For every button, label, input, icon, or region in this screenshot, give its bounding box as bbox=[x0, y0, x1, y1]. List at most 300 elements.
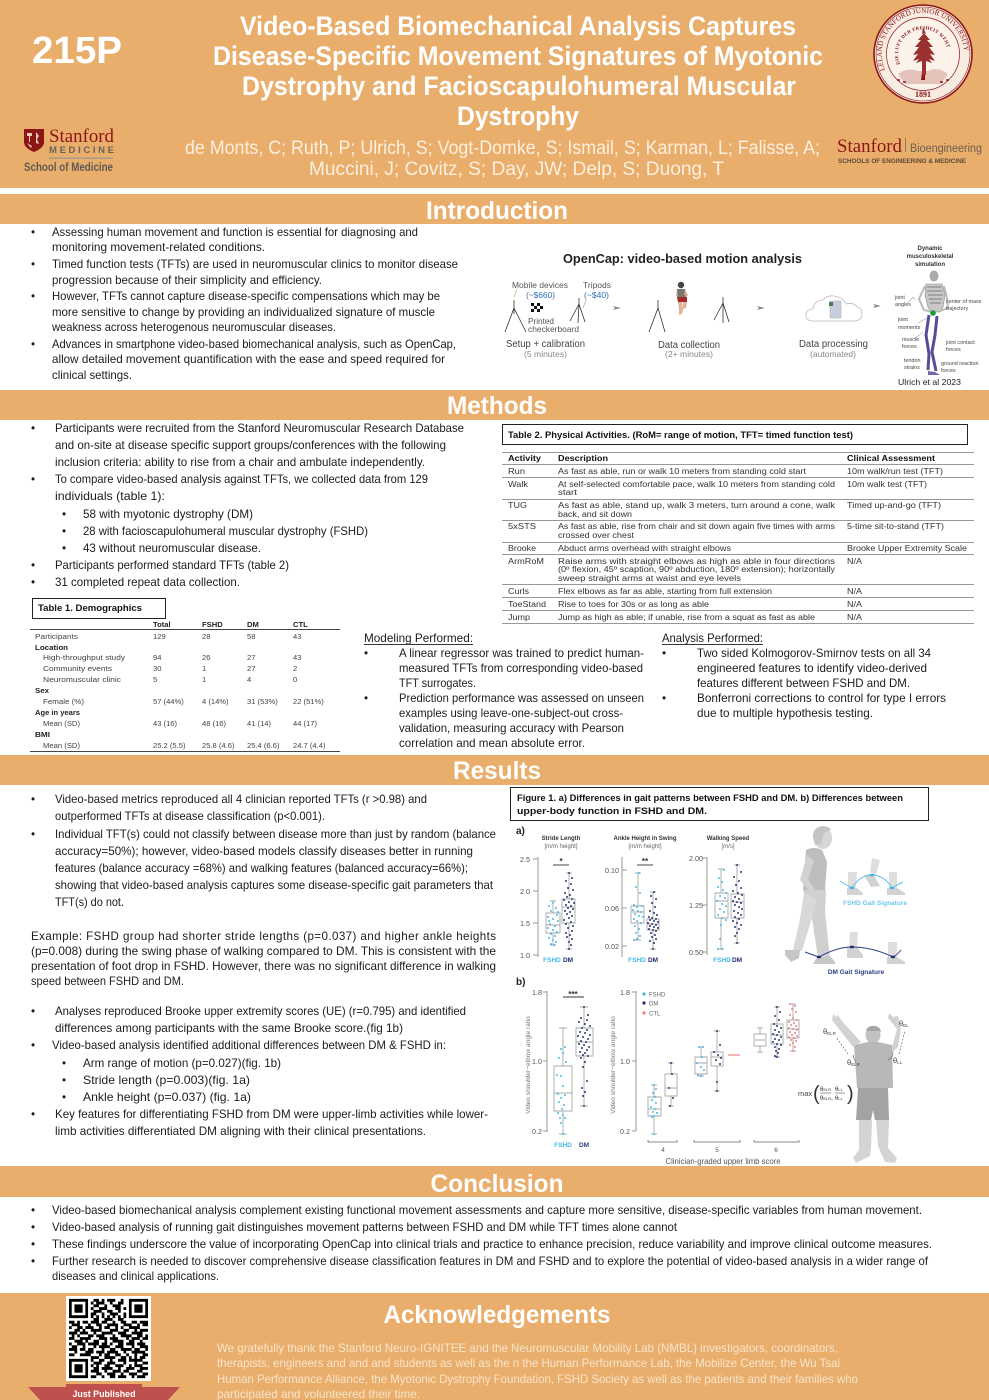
text block: introduction bullets: • bbox=[31, 258, 35, 271]
chart: ratio by clinician score: Clinician-graded upper limb score bbox=[666, 1157, 781, 1166]
logo: Stanford seal: 1891 bbox=[915, 90, 931, 99]
chart: ratio by clinician score: 0.2 bbox=[620, 1127, 630, 1136]
logo: Stanford Medicine: Stanford bbox=[49, 126, 114, 147]
table 2: physical activities: N/A bbox=[847, 557, 863, 566]
table 1: demographics: Neuromuscular clinic bbox=[43, 675, 121, 684]
table 2: physical activities: (0º flexion, 45º scaption, 90º abduction, 180º extension); horizontally bbox=[558, 565, 835, 574]
table 1: demographics: 48 (16) bbox=[202, 719, 227, 728]
logo: Stanford seal bbox=[873, 4, 973, 104]
table 2: physical activities: Flex elbows as far as able, starting from full extension bbox=[558, 587, 772, 596]
chart: stride length: 2.0 bbox=[520, 887, 530, 896]
chart: walking speed: FSHD bbox=[713, 957, 731, 964]
arrow bbox=[613, 306, 621, 310]
table 1: demographics: 57 (44%) bbox=[153, 697, 184, 706]
figure 1 caption: Figure 1. a) Differences in gait patterns between FSHD and DM. b) Differences between bbox=[517, 793, 903, 804]
data processing step: (automated) bbox=[810, 349, 856, 359]
skeleton simulation: muscle bbox=[902, 337, 919, 343]
skeleton simulation: forces bbox=[946, 347, 961, 353]
table 2: physical activities: back, and sit down bbox=[558, 510, 632, 519]
text block: modeling performed: validation, measuring accuracy with Pearson bbox=[399, 722, 624, 735]
setup and calibration step: Printed bbox=[528, 316, 554, 326]
text block: analysis performed: Two sided Kolmogorov-Smirnov tests on all 34 bbox=[697, 647, 932, 660]
chart: walking speed bbox=[689, 836, 750, 964]
illustration: arms raised figure with angle formula: θLL bbox=[835, 1096, 844, 1102]
text block: upper limb findings: limb activities differentiated DM aligning with their clinical presentations. bbox=[55, 1125, 426, 1138]
skeleton simulation: center of mass bbox=[946, 299, 982, 305]
chart: stride length: FSHD bbox=[543, 957, 561, 964]
text block: results bullets: accuracy=50%); however, video-based models classify diseases better in running bbox=[55, 845, 473, 858]
text block: introduction bullets: allow detailed movement quantification with the ease and speed required for bbox=[52, 353, 445, 366]
illustration: arms raised figure with angle formula: θELR bbox=[820, 1087, 831, 1093]
poster number: 215P bbox=[32, 30, 122, 72]
arrow bbox=[873, 304, 881, 308]
logo: Stanford Medicine bbox=[24, 126, 114, 174]
table 2: physical activities: crossed over chest bbox=[558, 531, 635, 540]
table 1: demographics: FSHD bbox=[202, 620, 223, 629]
section heading: Conclusion: Conclusion bbox=[430, 1170, 564, 1198]
table 2: physical activities: Curls bbox=[508, 587, 529, 596]
chart: ankle height in swing: 0.10 bbox=[605, 866, 619, 875]
text block: introduction bullets: clinical settings. bbox=[52, 369, 132, 382]
illustration: arms raised figure with angle formula: ) bbox=[847, 1083, 854, 1105]
table 2: physical activities: Jump as high as able; if unable, rise from a squat as fast as able bbox=[558, 613, 816, 622]
table 1: demographics: 27 bbox=[247, 664, 255, 673]
skeleton simulation: strains bbox=[904, 365, 920, 371]
chart: ankle height in swing: 0.06 bbox=[605, 904, 619, 913]
text block: analysis performed: due to multiple hypothesis testing. bbox=[697, 707, 873, 720]
table 1: demographics: CTL bbox=[293, 620, 308, 629]
ribbon: just published bbox=[28, 1384, 180, 1400]
DM gait signature bbox=[805, 932, 905, 976]
text block: methods bullets: • bbox=[31, 473, 35, 486]
skeleton simulation: ground reaction bbox=[941, 361, 978, 367]
logo: Stanford seal: DIE LUFT DER FREIHEIT WEHT bbox=[894, 26, 950, 65]
text block: upper limb findings: • bbox=[31, 1039, 35, 1052]
skeleton simulation: Dynamic bbox=[917, 246, 943, 252]
illustration: arms raised figure with angle formula: θ bbox=[823, 1027, 827, 1036]
table 1: demographics: Table 1. Demographics bbox=[38, 603, 142, 613]
chart: shoulder elbow ratio by group: 1.8 bbox=[532, 988, 542, 997]
setup and calibration step: Mobile devices bbox=[512, 280, 568, 290]
section heading: Introduction bbox=[0, 194, 989, 225]
logo: Stanford Bioengineering bbox=[837, 136, 982, 165]
chart: ankle height in swing: FSHD bbox=[628, 957, 646, 964]
text block: methods bullets: Participants were recruited from the Stanford Neuromuscular Research Database bbox=[55, 422, 464, 435]
illustration: arms raised figure with angle formula: LL bbox=[897, 1060, 903, 1065]
text block: conclusion bullets: diseases and clinical applications. bbox=[52, 1270, 219, 1283]
text block: results bullets: Video-based metrics reproduced all 4 clinician reported TFTs (r >0.98) and bbox=[55, 793, 427, 806]
legend: CTL bbox=[649, 1012, 661, 1018]
text block: analysis performed: Analysis Performed: bbox=[662, 632, 763, 645]
text block: introduction bullets: • bbox=[31, 338, 35, 351]
text block: upper limb findings: Video-based analysis identified additional differences between DM & FSHD in: bbox=[52, 1039, 446, 1052]
logo: Stanford Bioengineering: Stanford bbox=[837, 136, 902, 157]
text block: conclusion bullets: These findings underscore the value of incorporating OpenCap into clinical trials and practice to enhance precision, reduce variability and improve clinical outcome measures. bbox=[52, 1238, 932, 1251]
table 1: demographics: 22 (51%) bbox=[293, 697, 324, 706]
text block: introduction bullets: Advances in smartphone video-based biomechanical analysis, such as OpenCap, bbox=[52, 338, 456, 351]
table 1: demographics: Mean (SD) bbox=[43, 741, 80, 750]
table 2: physical activities: Walk bbox=[508, 480, 529, 489]
skeleton simulation: simulation bbox=[915, 262, 945, 268]
text block: introduction bullets: progression because of their simplicity and efficiency. bbox=[52, 274, 322, 287]
table 2: physical activities: N/A bbox=[847, 600, 863, 609]
table 1: demographics: 24.7 (4.4) bbox=[293, 741, 326, 750]
illustration: arms raised figure with angle formula: θELR, bbox=[820, 1096, 833, 1102]
skeleton simulation: Ulrich et al 2023 bbox=[898, 377, 961, 387]
setup and calibration step: (~$40) bbox=[584, 290, 609, 300]
table 1: demographics: 44 (17) bbox=[293, 719, 318, 728]
text block: conclusion bullets: • bbox=[31, 1221, 35, 1234]
chart: walking speed: DM bbox=[732, 957, 742, 964]
skeleton simulation: angles bbox=[895, 302, 911, 308]
figure 1a: gait box plots bbox=[516, 826, 907, 976]
text block: results bullets bbox=[31, 793, 496, 909]
header band bbox=[0, 0, 989, 188]
table 2: physical activities bbox=[502, 424, 974, 624]
table 1: demographics: 4 bbox=[247, 675, 251, 684]
text block: modeling performed: Prediction performance was assessed on unseen bbox=[399, 692, 644, 705]
text block: acknowledgements: We gratefully thank the Stanford Neuro-IGNITEE and the Neuromuscular Mobility Lab (NMBL) investigators, coordinators, bbox=[217, 1341, 838, 1355]
section heading: Results bbox=[0, 755, 989, 785]
chart: stride length: DM bbox=[563, 957, 573, 964]
table 1: demographics: 27 bbox=[247, 653, 255, 662]
table 1: demographics: 94 bbox=[153, 653, 161, 662]
text block: modeling performed bbox=[364, 632, 644, 750]
table 1: demographics: 1 bbox=[202, 675, 206, 684]
setup and calibration step bbox=[505, 280, 611, 359]
text block: upper limb findings: • bbox=[62, 1057, 66, 1070]
table 1: demographics: 43 (16) bbox=[153, 719, 178, 728]
chart: ratio by clinician score: 6 bbox=[774, 1147, 778, 1154]
setup and calibration step: Tripods bbox=[583, 280, 611, 290]
text block: introduction bullets: Timed function tests (TFTs) are used in neuromuscular clinics to monitor disease bbox=[52, 258, 458, 271]
logo: Stanford Medicine: School of Medicine bbox=[24, 162, 113, 174]
setup and calibration step: checkerboard bbox=[528, 324, 579, 334]
chart: walking speed: [m/s] bbox=[722, 844, 735, 850]
table 2: physical activities: Brooke Upper Extremity Scale bbox=[847, 544, 968, 553]
text block: results bullets: • bbox=[31, 793, 35, 806]
data collection step: Data collection bbox=[658, 340, 720, 351]
text block: upper limb findings: Ankle height (p=0.037) (fig. 1a) bbox=[83, 1091, 251, 1104]
table 1: demographics: Participants bbox=[35, 632, 78, 641]
table 1: demographics: Sex bbox=[35, 686, 50, 695]
authors: Muccini, J; Covitz, S; Day, JW; Delp, S; Duong, T bbox=[309, 159, 724, 180]
chart: stride length: 2.5 bbox=[520, 855, 530, 864]
table 2: physical activities: sweep straight arms at waist and eye levels bbox=[558, 574, 741, 583]
text block: results bullets: • bbox=[31, 828, 35, 841]
text block: upper limb findings: Key features for differentiating FSHD from DM were upper-limb activities while lower- bbox=[55, 1108, 488, 1121]
text block: acknowledgements: therapists, engineers and and and students as well as the n the Human Performance Lab, the Mobilize Center, the Wu Tsai bbox=[217, 1356, 840, 1370]
table 2: physical activities: Clinical Assessment bbox=[847, 454, 935, 463]
text block: modeling performed: Modeling Performed: bbox=[364, 632, 473, 645]
authors bbox=[185, 138, 820, 180]
illustration: arms raised figure with angle formula bbox=[798, 1013, 909, 1163]
table 1: demographics: 25.8 (4.6) bbox=[202, 741, 235, 750]
section heading: Results: Results bbox=[453, 757, 541, 785]
chart: ankle height in swing: [m/m height] bbox=[628, 844, 662, 850]
text block: methods bullets: 58 with myotonic dystrophy (DM) bbox=[83, 508, 253, 521]
text block: conclusion bullets: • bbox=[31, 1204, 35, 1217]
text block: results bullets: features (balance accuracy =68%) and walking features (balanced accuracy=66%); bbox=[55, 862, 468, 875]
text block: introduction bullets: monitoring movement-related conditions. bbox=[52, 241, 265, 254]
text block: introduction bullets: • bbox=[31, 290, 35, 303]
ribbon: just published: Just Published bbox=[72, 1389, 136, 1399]
text block: modeling performed: A linear regressor was trained to predict human- bbox=[399, 647, 644, 660]
table 2: physical activities: As fast as able, stand up, walk 3 meters, turn around a cone, walk bbox=[558, 501, 836, 510]
table 2: physical activities: 5xSTS bbox=[508, 522, 536, 531]
QR code bbox=[66, 1296, 151, 1381]
skeleton simulation: joint bbox=[894, 295, 905, 301]
chart: walking speed: Walking Speed bbox=[707, 836, 750, 842]
chart: ratio by clinician score bbox=[610, 988, 799, 1166]
text block: introduction bullets: However, TFTs cannot capture disease-specific compensations which may be bbox=[52, 290, 440, 303]
text block: analysis performed: • bbox=[662, 692, 666, 705]
text block: upper limb findings: • bbox=[31, 1108, 35, 1121]
data processing step bbox=[799, 296, 868, 359]
table 1: demographics: Location bbox=[35, 643, 68, 652]
logo: Stanford Bioengineering: SCHOOLS OF ENGINEERING & MEDICINE bbox=[838, 158, 967, 165]
data collection step: (2+ minutes) bbox=[665, 349, 713, 359]
setup and calibration step: (~$660) bbox=[526, 290, 555, 300]
skeleton simulation: joint contact bbox=[945, 340, 975, 346]
text block: methods bullets: individuals (table 1): bbox=[55, 490, 165, 503]
text block: upper limb findings: Analyses reproduced Brooke upper extremity scores (UE) (r=0.795) and identified bbox=[55, 1005, 466, 1018]
illustration: arms raised figure with angle formula: θ bbox=[847, 1058, 851, 1067]
table 2: physical activities: 10m walk/run test (TFT) bbox=[847, 467, 943, 476]
illustration: arms raised figure with angle formula: θLL bbox=[835, 1087, 844, 1093]
data processing step: Data processing bbox=[799, 339, 868, 350]
text block: upper limb findings: • bbox=[31, 1005, 35, 1018]
diagram: OpenCap workflow bbox=[505, 246, 982, 387]
text block: upper limb findings: • bbox=[62, 1091, 66, 1104]
table 2: physical activities: N/A bbox=[847, 613, 863, 622]
DM gait signature: DM Gait Signature bbox=[828, 969, 885, 976]
table 2: physical activities: Timed up-and-go (TFT) bbox=[847, 501, 941, 510]
diagram: OpenCap workflow: OpenCap: video-based motion analysis bbox=[563, 251, 802, 266]
chart: stride length: 1.5 bbox=[520, 919, 530, 928]
text block: analysis performed: features different between FSHD and DM. bbox=[697, 677, 910, 690]
illustration: arms raised figure with angle formula: ELR bbox=[851, 1062, 861, 1067]
table 2: physical activities: Description bbox=[558, 454, 608, 463]
setup and calibration step: Setup + calibration bbox=[506, 339, 585, 350]
table 1: demographics: 0 bbox=[293, 675, 297, 684]
skeleton simulation: musculoskeletal bbox=[907, 254, 954, 260]
table 1: demographics: 41 (14) bbox=[247, 719, 272, 728]
figure 1 caption: upper-body function in FSHD and DM. bbox=[517, 806, 707, 817]
table 2: physical activities: Activity bbox=[508, 454, 542, 463]
text block: acknowledgements: Human Performance Alliance, the Myotonic Dystrophy Foundation, FSHD Society as well as the patients and their families who bbox=[217, 1372, 858, 1386]
skeleton simulation: moments bbox=[898, 325, 920, 331]
text block: conclusion bullets: • bbox=[31, 1238, 35, 1251]
table 2: physical activities: As fast as able, rise from chair and sit down again five times with arms bbox=[558, 522, 835, 531]
figure 1b: upper limb plots bbox=[516, 977, 909, 1166]
table 2: physical activities: ArmRoM bbox=[508, 557, 544, 566]
section heading: Methods bbox=[0, 390, 989, 420]
table 1: demographics: High-throughput study bbox=[43, 653, 125, 662]
text block: introduction bullets: more sensitive to change by providing an individualized signature of muscle bbox=[52, 306, 435, 319]
title bbox=[213, 11, 823, 131]
text block: methods bullets: • bbox=[62, 525, 66, 538]
heading: acknowledgements: Acknowledgements bbox=[384, 1301, 610, 1329]
table 1: demographics: 2 bbox=[293, 664, 297, 673]
chart: ankle height in swing: ** bbox=[642, 857, 649, 866]
chart: stride length: * bbox=[559, 857, 563, 866]
chart: stride length: 1.0 bbox=[520, 951, 530, 960]
illustration: arms raised figure with angle formula: θ bbox=[893, 1056, 897, 1065]
table 2: physical activities: Jump bbox=[508, 613, 531, 622]
text block: methods bullets: 28 with facioscapulohumeral muscular dystrophy (FSHD) bbox=[83, 525, 368, 538]
text block: modeling performed: • bbox=[364, 647, 368, 660]
text block: example paragraph: speed between FSHD and DM. bbox=[31, 975, 184, 988]
text block: introduction bullets: Assessing human movement and function is essential for diagnosing and bbox=[52, 226, 418, 239]
table 2: physical activities: Abduct arms overhead with straight elbows bbox=[558, 544, 731, 553]
acknowledgements band bbox=[0, 1293, 989, 1400]
data collection step bbox=[649, 282, 729, 359]
table 2: physical activities: Raise arms with straight elbows as high as able in four directions bbox=[558, 557, 835, 566]
authors: de Monts, C; Ruth, P; Ulrich, S; Vogt-Domke, S; Ismail, S; Karman, L; Falisse, A; bbox=[185, 138, 820, 159]
chart: ankle height in swing: 0.02 bbox=[605, 942, 619, 951]
illustration: arms raised figure with angle formula: max bbox=[798, 1089, 812, 1098]
chart: ratio by clinician score: 4 bbox=[661, 1147, 665, 1154]
text block: methods bullets: 43 without neuromuscular disease. bbox=[83, 542, 261, 555]
table 2: physical activities: TUG bbox=[508, 501, 527, 510]
table 1: demographics: 5 bbox=[153, 675, 157, 684]
section heading: Methods: Methods bbox=[447, 392, 547, 420]
table 2: physical activities: N/A bbox=[847, 587, 863, 596]
text block: methods bullets bbox=[31, 422, 464, 589]
chart: walking speed: 0.50 bbox=[689, 948, 703, 957]
table 1: demographics: 31 (53%) bbox=[247, 697, 278, 706]
text block: introduction bullets: weakness across heterogenous neuromuscular diseases. bbox=[51, 321, 336, 334]
title: Video-Based Biomechanical Analysis Captures bbox=[240, 11, 796, 41]
table 1: demographics: 26 bbox=[202, 653, 210, 662]
chart: shoulder elbow ratio by group: Video shoulder−elbow angle ratio bbox=[525, 1016, 532, 1114]
chart: stride length: [m/m height] bbox=[544, 844, 578, 850]
text block: upper limb findings bbox=[31, 1005, 488, 1138]
chart: shoulder elbow ratio by group: DM bbox=[579, 1142, 589, 1149]
FSHD gait signature: FSHD Gait Signature bbox=[843, 900, 907, 907]
table 2: physical activities: As fast as able, run or walk 10 meters from standing cold start bbox=[558, 467, 807, 476]
table 1: demographics: Mean (SD) bbox=[43, 719, 80, 728]
text block: conclusion bullets: Video-based analysis of running gait distinguishes movement patterns between FSHD and DM while TFT times alone cannot bbox=[52, 1221, 678, 1234]
chart: ankle height in swing: Ankle Height in Swing bbox=[613, 836, 677, 842]
table 2: physical activities: Brooke bbox=[508, 544, 537, 553]
logo: Stanford seal: LELAND STANFORD JUNIOR UNIVERSITY bbox=[877, 8, 969, 72]
text block: introduction bullets: • bbox=[31, 226, 35, 239]
table 1: demographics: 43 bbox=[293, 653, 301, 662]
text block: methods bullets: • bbox=[62, 508, 66, 521]
chart: ankle height in swing: DM bbox=[648, 957, 658, 964]
table 2: physical activities: start bbox=[558, 488, 578, 497]
illustration: arms raised figure with angle formula: ( bbox=[813, 1083, 820, 1105]
table 2: physical activities: Run bbox=[508, 467, 525, 476]
text block: conclusion bullets: • bbox=[31, 1255, 35, 1268]
text block: upper limb findings: differences among participants with the same Brooke score.(fig 1b) bbox=[55, 1022, 403, 1035]
text block: methods bullets: and on-site at disease specific support groups/conferences with the following bbox=[55, 439, 446, 452]
text block: analysis performed bbox=[662, 632, 946, 720]
table 1: demographics: 4 (14%) bbox=[202, 697, 229, 706]
text block: conclusion bullets bbox=[31, 1204, 932, 1283]
table 1: demographics: Age in years bbox=[35, 708, 80, 717]
title: Disease-Specific Movement Signatures of Myotonic bbox=[213, 41, 823, 71]
table 2: physical activities: Table 2. Physical Activities. (RoM= range of motion, TFT= timed function test) bbox=[508, 430, 853, 441]
table 2: physical activities: 5-time sit-to-stand (TFT) bbox=[847, 522, 944, 531]
chart: ratio by clinician score: Video shoulder−elbow angle ratio bbox=[610, 1016, 617, 1114]
chart: shoulder elbow ratio by group: 0.2 bbox=[532, 1127, 542, 1136]
FSHD gait signature bbox=[840, 858, 907, 907]
text block: analysis performed: • bbox=[662, 647, 666, 660]
section heading: Introduction: Introduction bbox=[426, 197, 568, 225]
text block: results bullets: Individual TFT(s) could not classify between disease more than just by random (balance bbox=[55, 828, 496, 841]
text block: methods bullets: inclusion criteria: ability to rise from a chair and ambulate independently. bbox=[55, 456, 425, 469]
chart: shoulder elbow ratio by group: FSHD bbox=[554, 1142, 572, 1149]
table 1: demographics: 28 bbox=[202, 632, 210, 641]
table 1: demographics bbox=[30, 598, 340, 752]
text block: modeling performed: measured TFTs from corresponding video-based bbox=[399, 662, 643, 675]
table 2: physical activities: Rise to toes for 30s or as long as able bbox=[558, 600, 710, 609]
skeleton simulation: tendon bbox=[904, 358, 920, 364]
legend bbox=[642, 992, 666, 1018]
table 1: demographics: Female (%) bbox=[43, 697, 84, 706]
table 2: physical activities: 10m walk test (TFT) bbox=[847, 480, 927, 489]
table 1: demographics: 1 bbox=[202, 664, 206, 673]
skeleton simulation bbox=[894, 246, 982, 387]
text block: upper limb findings: Arm range of motion (p=0.027)(fig. 1b) bbox=[83, 1057, 281, 1070]
text block: results bullets: outperformed TFTs at disease classification (p<0.001). bbox=[55, 810, 325, 823]
table 1: demographics: Community events bbox=[43, 664, 112, 673]
table 1: demographics: BMI bbox=[35, 730, 50, 739]
text block: analysis performed: engineered features to identify video-derived bbox=[697, 662, 927, 675]
text block: methods bullets: • bbox=[62, 542, 66, 555]
skeleton simulation: forces bbox=[902, 344, 917, 350]
table 1: demographics: 58 bbox=[247, 632, 255, 641]
text block: example paragraph: presentation of foot drop in FSHD. However, there was no significant difference in walking bbox=[31, 960, 496, 973]
text block: modeling performed: • bbox=[364, 692, 368, 705]
chart: ratio by clinician score: 1.0 bbox=[620, 1057, 630, 1066]
table 1: demographics: 30 bbox=[153, 664, 161, 673]
table 1: demographics: 43 bbox=[293, 632, 301, 641]
text block: conclusion bullets: Further research is needed to discover comprehensive disease classification features in DM and FSHD and to explore the potential of video-based analysis in a wider range of bbox=[52, 1255, 929, 1268]
illustration: arms raised figure with angle formula: ELR bbox=[827, 1031, 837, 1036]
table 2: physical activities: At self-selected comfortable pace, walk 10 meters from standing cold bbox=[558, 480, 835, 489]
logo: Stanford Bioengineering: Bioengineering bbox=[910, 143, 982, 155]
skeleton simulation: forces bbox=[941, 368, 956, 374]
text block: results bullets: TFT(s) do not. bbox=[55, 896, 124, 909]
setup and calibration step: (5 minutes) bbox=[524, 349, 567, 359]
section heading: Conclusion bbox=[0, 1166, 989, 1198]
text block: results bullets: showing that video-based analysis captures some disease-specific gait parameters that bbox=[55, 879, 494, 892]
text block: methods bullets: To compare video-based analysis against TFTs, we collected data from 129 bbox=[55, 473, 428, 486]
text block: example paragraph: Example: FSHD group had shorter stride lengths (p=0.037) and higher ankle heights bbox=[31, 930, 496, 943]
text block: methods bullets: Participants performed standard TFTs (table 2) bbox=[55, 559, 289, 572]
text block: example paragraph bbox=[31, 930, 496, 988]
text block: acknowledgements bbox=[217, 1341, 858, 1400]
logo: Stanford Medicine: MEDICINE bbox=[49, 145, 114, 156]
table 2: physical activities: ToeStand bbox=[508, 600, 546, 609]
skeleton simulation: trajectory bbox=[946, 306, 968, 312]
illustration: walking figure and gait signatures bbox=[785, 826, 907, 976]
text block: conclusion bullets: Video-based biomechanical analysis complement existing functional movement assessments and capture more sensitive, disease-specific variables from human movement. bbox=[52, 1204, 922, 1217]
arrow bbox=[757, 306, 765, 310]
text block: upper limb findings: Stride length (p=0.003)(fig. 1a) bbox=[83, 1074, 250, 1087]
title: Dystrophy bbox=[457, 101, 579, 131]
table 1: demographics: 25.4 (6.6) bbox=[247, 741, 280, 750]
table 1: demographics: DM bbox=[247, 620, 259, 629]
figure 1 caption bbox=[510, 788, 928, 820]
text block: modeling performed: correlation and mean absolute error. bbox=[399, 737, 585, 750]
text block: methods bullets: • bbox=[31, 559, 35, 572]
text block: upper limb findings: • bbox=[62, 1074, 66, 1087]
